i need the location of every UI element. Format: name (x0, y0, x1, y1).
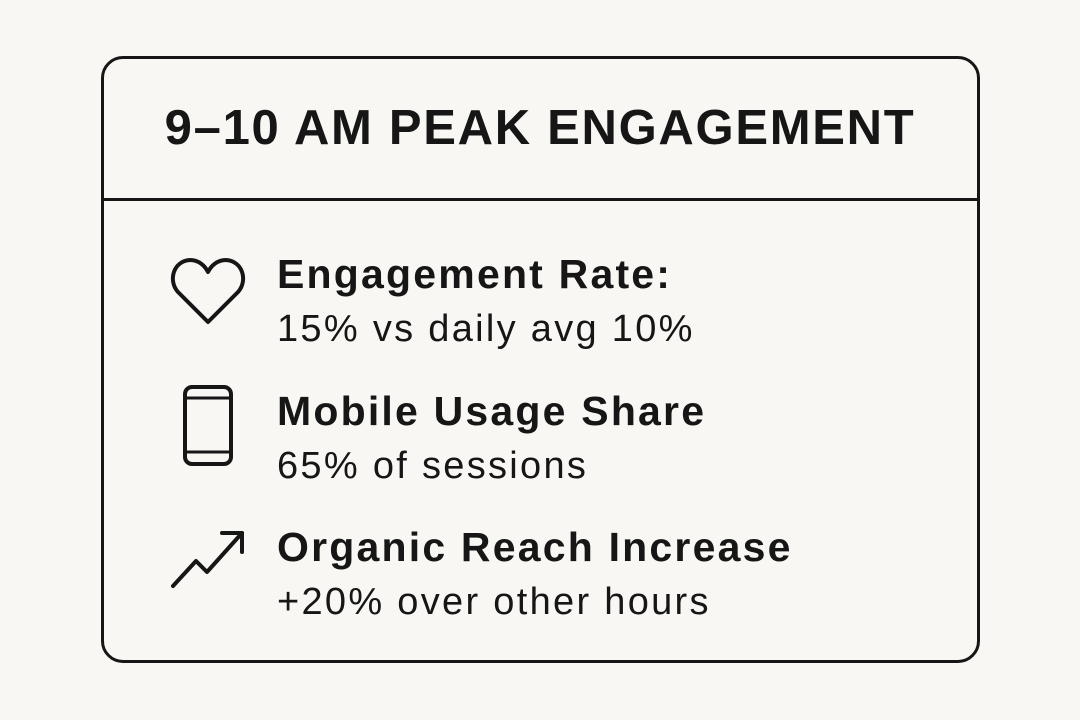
icon: phone (183, 385, 233, 466)
row: mobile usage: 65% of sessions (277, 445, 588, 487)
text: engagement rate (277, 251, 695, 350)
row: engagement rate: 15% vs daily avg 10% (277, 308, 695, 350)
row: organic reach: +20% over other hours (277, 581, 711, 623)
text: mobile usage (277, 388, 706, 487)
row: engagement rate: Engagement Rate: (277, 251, 672, 297)
icon: heart (170, 258, 246, 324)
text: organic reach (277, 524, 793, 623)
panel: card (101, 56, 980, 663)
row: mobile usage: Mobile Usage Share (277, 388, 706, 434)
title: 9–10 AM PEAK ENGAGEMENT (165, 101, 915, 155)
row: engagement rate (170, 251, 695, 350)
row: organic reach: Organic Reach Increase (277, 524, 793, 570)
row: organic reach (170, 524, 793, 623)
row: mobile usage (183, 385, 706, 487)
icon: trend arrow (170, 530, 244, 588)
